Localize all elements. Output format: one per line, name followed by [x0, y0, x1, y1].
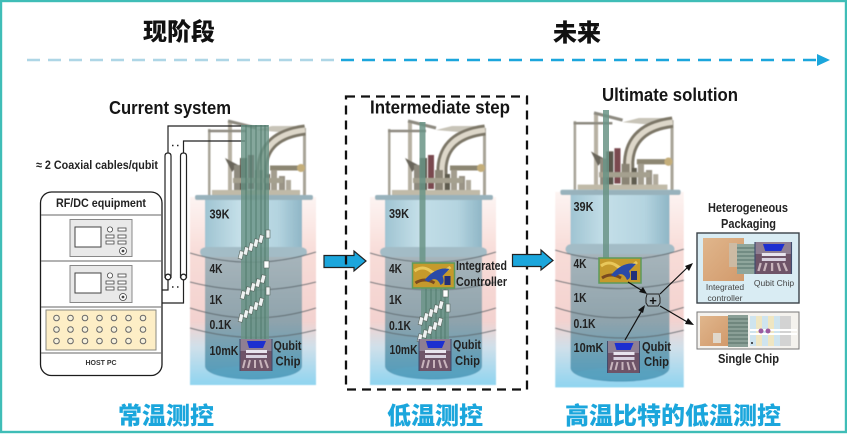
- qubit chip label 3: Chip: [644, 355, 669, 369]
- cryostat 3: [555, 113, 684, 387]
- column title: intermediate step: Intermediate step: [370, 98, 510, 118]
- temperature labels 3: 0.1K: [574, 317, 596, 331]
- temperature labels 1: 4K: [210, 262, 222, 276]
- qubit chip label 3: Qubit: [642, 340, 672, 354]
- qubit chip label 1: [274, 339, 302, 368]
- single chip label: Single Chip: [718, 352, 779, 366]
- qubit chip label 1: Chip: [276, 354, 301, 368]
- cryostat 2: [370, 121, 496, 385]
- heading: present stage: 现阶段: [143, 18, 215, 46]
- caption: hot qubit cryogenic control: 高温比特的低温测控: [565, 402, 781, 430]
- qubit chip label 2: Qubit: [453, 338, 482, 352]
- column title: current system: Current system: [109, 98, 231, 118]
- label: integrated controller: [706, 282, 744, 303]
- temperature labels 3: [574, 200, 604, 355]
- temperature labels 3: 4K: [574, 257, 586, 271]
- dashed box: [346, 96, 527, 390]
- temperature labels 2: 4K: [389, 262, 402, 276]
- label: integrated controller: Integrated: [706, 282, 744, 292]
- coaxial cables: [162, 126, 268, 303]
- temperature labels 1: 0.1K: [210, 318, 232, 332]
- caption: cryogenic control: 低温测控: [387, 403, 483, 430]
- cable label: ≈ 2 Coaxial cables/qubit: [36, 158, 158, 172]
- heterogeneous packaging heading: Packaging: [721, 217, 776, 231]
- timeline arrow: [27, 54, 830, 66]
- combine node and arrows: +: [649, 293, 657, 308]
- cryostat 1: [190, 121, 316, 385]
- temperature labels 3: 10mK: [574, 341, 604, 355]
- instrument 1: [70, 220, 132, 256]
- integrated controller chip 2: [412, 263, 454, 288]
- label: integrated controller: controller: [708, 293, 743, 303]
- qubit chip 1: [240, 339, 272, 371]
- qubit chip label 3: [642, 340, 672, 369]
- qubit chip label 2: Chip: [455, 354, 480, 368]
- qubit chip 2: [419, 339, 451, 371]
- cable 2: [420, 122, 426, 264]
- connector panel: [46, 310, 156, 350]
- label: qubit chip: Qubit Chip: [754, 278, 794, 288]
- panel: heterogeneous packaging: [697, 233, 799, 303]
- rack label: RF/DC equipment: [56, 196, 146, 210]
- integrated controller chip 3: [599, 258, 641, 283]
- heterogeneous packaging heading: [708, 201, 788, 231]
- combine node and arrows: [625, 263, 694, 340]
- panel: single chip: [697, 312, 799, 349]
- cable bundle 2: [417, 288, 450, 342]
- caption: room temperature control: 常温测控: [118, 403, 214, 430]
- arrow 2: [512, 250, 553, 270]
- temperature labels 1: 10mK: [210, 344, 238, 358]
- heading: future: 未来: [553, 20, 601, 47]
- controller label: [456, 259, 507, 289]
- arrow 1: [324, 251, 366, 271]
- temperature labels 2: [389, 207, 418, 357]
- panel: RF/DC equipment rack: [40, 192, 162, 376]
- cable 3: [603, 110, 609, 260]
- controller label: Controller: [456, 275, 507, 289]
- temperature labels 2: 1K: [389, 293, 402, 307]
- temperature labels 2: 39K: [389, 207, 409, 221]
- host pc label: HOST PC: [85, 360, 117, 367]
- temperature labels 3: 1K: [574, 291, 586, 305]
- heterogeneous packaging heading: Heterogeneous: [708, 201, 788, 215]
- qubit chip 3: [608, 341, 640, 373]
- column title: ultimate solution: Ultimate solution: [602, 85, 738, 105]
- temperature labels 1: 39K: [210, 208, 230, 222]
- temperature labels 3: 39K: [574, 200, 594, 214]
- qubit chip label 1: Qubit: [274, 339, 302, 353]
- temperature labels 2: 0.1K: [389, 319, 411, 333]
- temperature labels 1: [210, 208, 238, 358]
- qubit chip label 2: [453, 338, 482, 368]
- temperature labels 1: 1K: [210, 293, 222, 307]
- instrument 2: [70, 266, 132, 302]
- controller label: Integrated: [456, 259, 507, 273]
- cable bundle 1: [238, 125, 270, 340]
- temperature labels 2: 10mK: [390, 343, 418, 357]
